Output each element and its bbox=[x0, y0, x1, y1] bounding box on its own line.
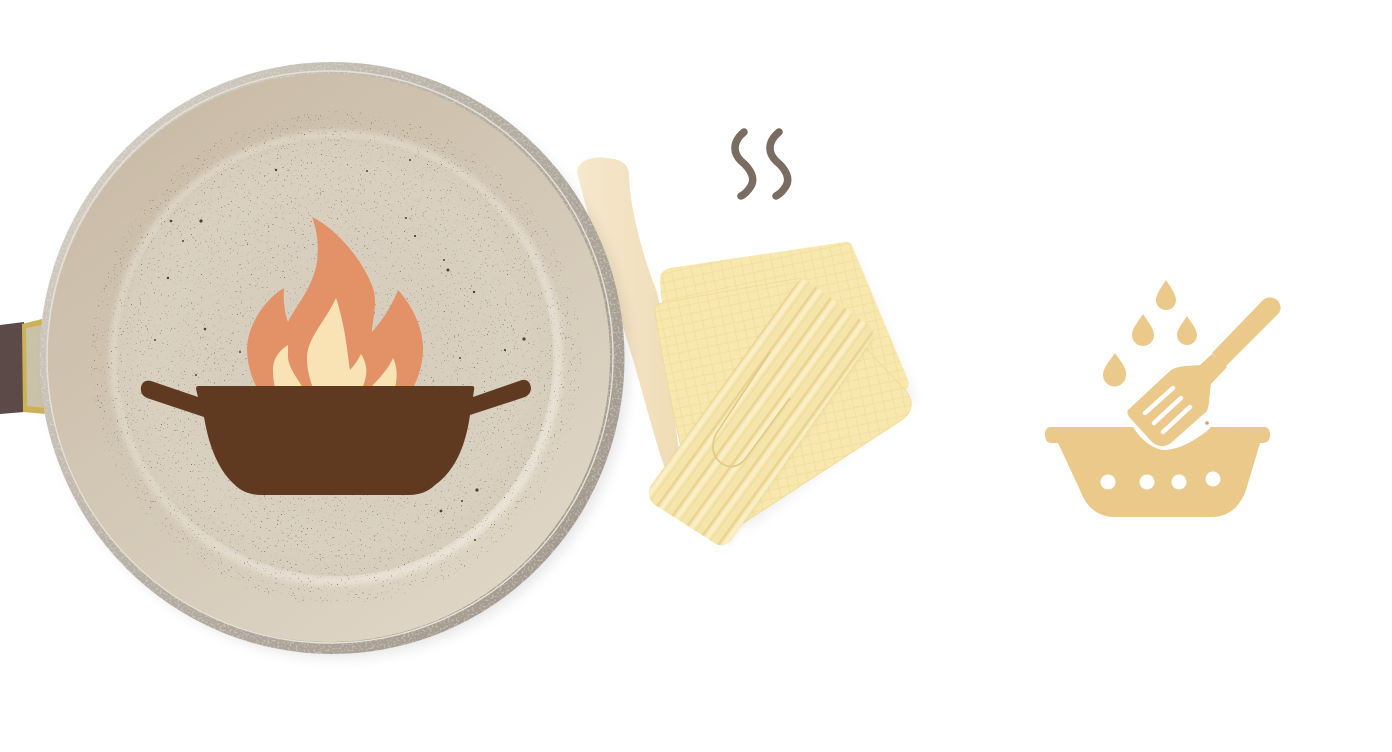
inner ring highlight bbox=[114, 135, 558, 581]
large speckles bbox=[154, 159, 526, 541]
pan speckles bbox=[91, 111, 581, 605]
fluted pasta piece bbox=[649, 280, 873, 545]
inner flame left bbox=[273, 345, 303, 388]
frying pan bbox=[0, 62, 628, 657]
spatula handle bbox=[1212, 298, 1281, 367]
rim highlight bbox=[47, 71, 613, 643]
handle bracket bbox=[22, 319, 46, 414]
icon: bowl with spatula bbox=[1045, 280, 1281, 517]
pot body bbox=[141, 380, 531, 495]
middle pasta sheet bbox=[655, 278, 911, 523]
bowl holes bbox=[1100, 472, 1220, 490]
spatula outline bbox=[1127, 355, 1227, 446]
bowl bbox=[1045, 427, 1270, 517]
icon: flame bbox=[247, 217, 423, 388]
spatula slots bbox=[1145, 388, 1190, 432]
outer rim bbox=[40, 62, 624, 654]
pasta slot bbox=[713, 352, 790, 467]
rim texture bbox=[40, 62, 624, 654]
pasta shadow bbox=[668, 250, 915, 530]
food speck bbox=[1205, 421, 1209, 425]
wooden spoon bbox=[577, 158, 682, 470]
pasta stack bbox=[649, 242, 915, 545]
icon: cooking pot bbox=[141, 380, 531, 495]
steam lines bbox=[735, 132, 788, 196]
inner flame center bbox=[307, 298, 366, 388]
spatula head bbox=[1127, 354, 1227, 446]
pan wall bbox=[48, 74, 610, 642]
oil drops bbox=[1103, 280, 1197, 386]
fluted pasta shadow bbox=[652, 287, 873, 544]
inner flame right bbox=[370, 358, 397, 388]
pan floor bbox=[119, 140, 553, 576]
pan handle bbox=[0, 322, 24, 414]
outer flame bbox=[247, 217, 423, 388]
pan shadow bbox=[48, 71, 628, 657]
back pasta sheet bbox=[660, 242, 908, 518]
